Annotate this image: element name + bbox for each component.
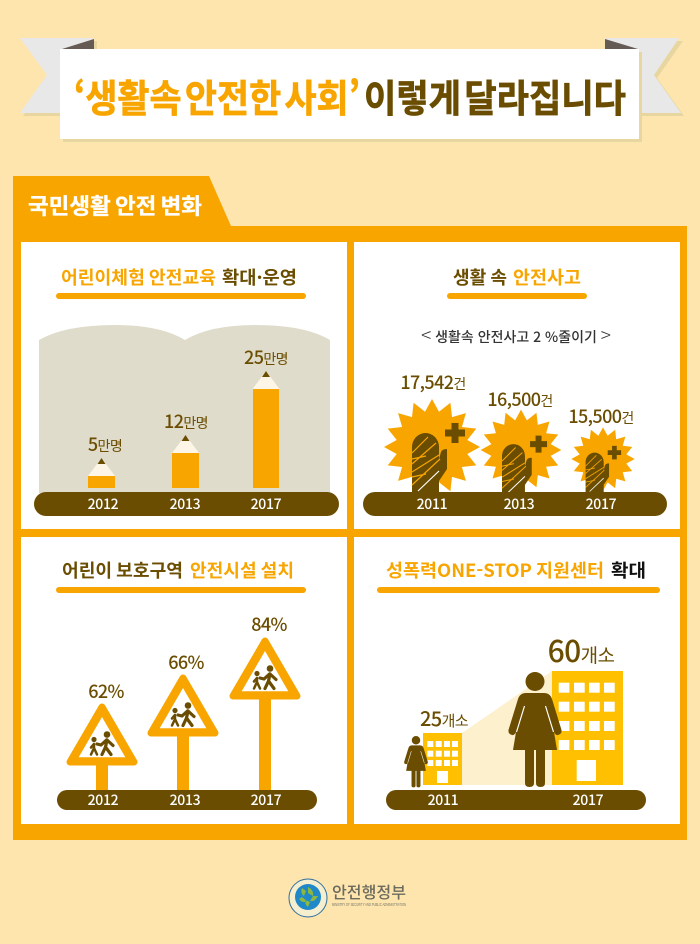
- value labels: [420, 627, 614, 732]
- icon: bandaged finger 2013: [502, 436, 547, 495]
- value labels: 84%: [251, 611, 288, 637]
- starburst 2017: [571, 427, 635, 491]
- year axis: 2013: [170, 494, 201, 514]
- value labels: 25만명: [244, 344, 288, 370]
- panel 1 heading: 어린이체험 안전교육: [61, 264, 216, 290]
- year axis: [34, 492, 339, 516]
- panel: child safety education: [21, 242, 347, 529]
- pencil bar 2013: [172, 435, 199, 488]
- panel 3 heading: [56, 557, 306, 593]
- road sign 2017: [233, 641, 297, 792]
- panel 3 heading: 어린이 보호구역: [62, 557, 183, 583]
- value labels: 16,500건: [487, 386, 553, 412]
- panel 2 heading: 안전사고: [513, 264, 581, 290]
- value labels: 5만명: [88, 431, 122, 457]
- title text: [74, 68, 626, 123]
- panel 4 heading: 확대: [611, 557, 646, 583]
- wordmark: 안전행정부: [332, 879, 406, 903]
- panel 1 heading: 확대·운영: [222, 264, 297, 290]
- orange section frame with tab: [13, 176, 687, 840]
- value labels: 25개소: [420, 703, 469, 732]
- panel: everyday safety accidents: [354, 242, 680, 529]
- year axis: 2011: [428, 790, 459, 810]
- starburst 2011: [384, 399, 480, 495]
- building 2017: [552, 671, 623, 785]
- icon: emblem: [289, 879, 327, 917]
- starburst 2013: [481, 410, 561, 490]
- panel 3 heading: 안전시설 설치: [190, 557, 294, 583]
- panel 2 heading: 생활 속: [453, 264, 507, 290]
- growth wedge: [462, 671, 552, 785]
- value labels: 15,500건: [568, 403, 634, 429]
- value labels: 62%: [88, 678, 125, 704]
- book background: [39, 325, 330, 493]
- panel 1 heading: [56, 264, 306, 299]
- panel 4 heading: [377, 557, 660, 593]
- year axis: 2017: [573, 790, 604, 810]
- panel 2 heading: [447, 264, 587, 299]
- value labels: 60개소: [548, 627, 614, 671]
- icon: small woman: [404, 736, 428, 787]
- year axis: 2017: [586, 494, 617, 514]
- title text: 이렇게 달라집니다: [364, 68, 626, 123]
- icon: bandaged finger 2017: [586, 446, 621, 493]
- icon: large woman: [508, 672, 562, 787]
- year axis: 2017: [251, 494, 282, 514]
- wordmark english: MINISTRY OF SECURITY AND PUBLIC ADMINISTRATION: [332, 902, 406, 907]
- year axis: 2012: [88, 494, 119, 514]
- year axis: 2011: [417, 494, 448, 514]
- building 2011: [423, 733, 462, 785]
- value labels: 17,542건: [400, 369, 466, 395]
- value labels: 12만명: [164, 408, 208, 434]
- value labels: 66%: [168, 649, 205, 675]
- ministry logo: [289, 879, 406, 917]
- icon: bandaged finger 2011: [412, 423, 465, 493]
- year axis: [386, 790, 646, 810]
- pencil bar 2012: [88, 458, 115, 488]
- panel 4 heading: 성폭력ONE-STOP 지원센터: [386, 557, 604, 583]
- year axis: [57, 790, 317, 810]
- pencil bar 2017: [252, 371, 280, 488]
- year axis: 2017: [251, 790, 282, 810]
- value labels: [400, 369, 634, 429]
- road sign 2013: [151, 678, 215, 792]
- value labels: [88, 344, 288, 457]
- year axis: [363, 492, 667, 516]
- section heading: 국민생활 안전 변화: [28, 189, 202, 221]
- road sign 2012: [70, 707, 134, 792]
- panel: one-stop support centers: [354, 537, 680, 824]
- title text: ‘생활속 안전한 사회’: [74, 68, 360, 123]
- panel: school zone safety facilities: [21, 537, 347, 824]
- year axis: 2013: [504, 494, 535, 514]
- value labels: [88, 611, 288, 704]
- year axis: 2013: [170, 790, 201, 810]
- subtitle: < 생활속 안전사고 2 %줄이기 >: [421, 321, 611, 348]
- title ribbon: [20, 38, 684, 142]
- year axis: 2012: [88, 790, 119, 810]
